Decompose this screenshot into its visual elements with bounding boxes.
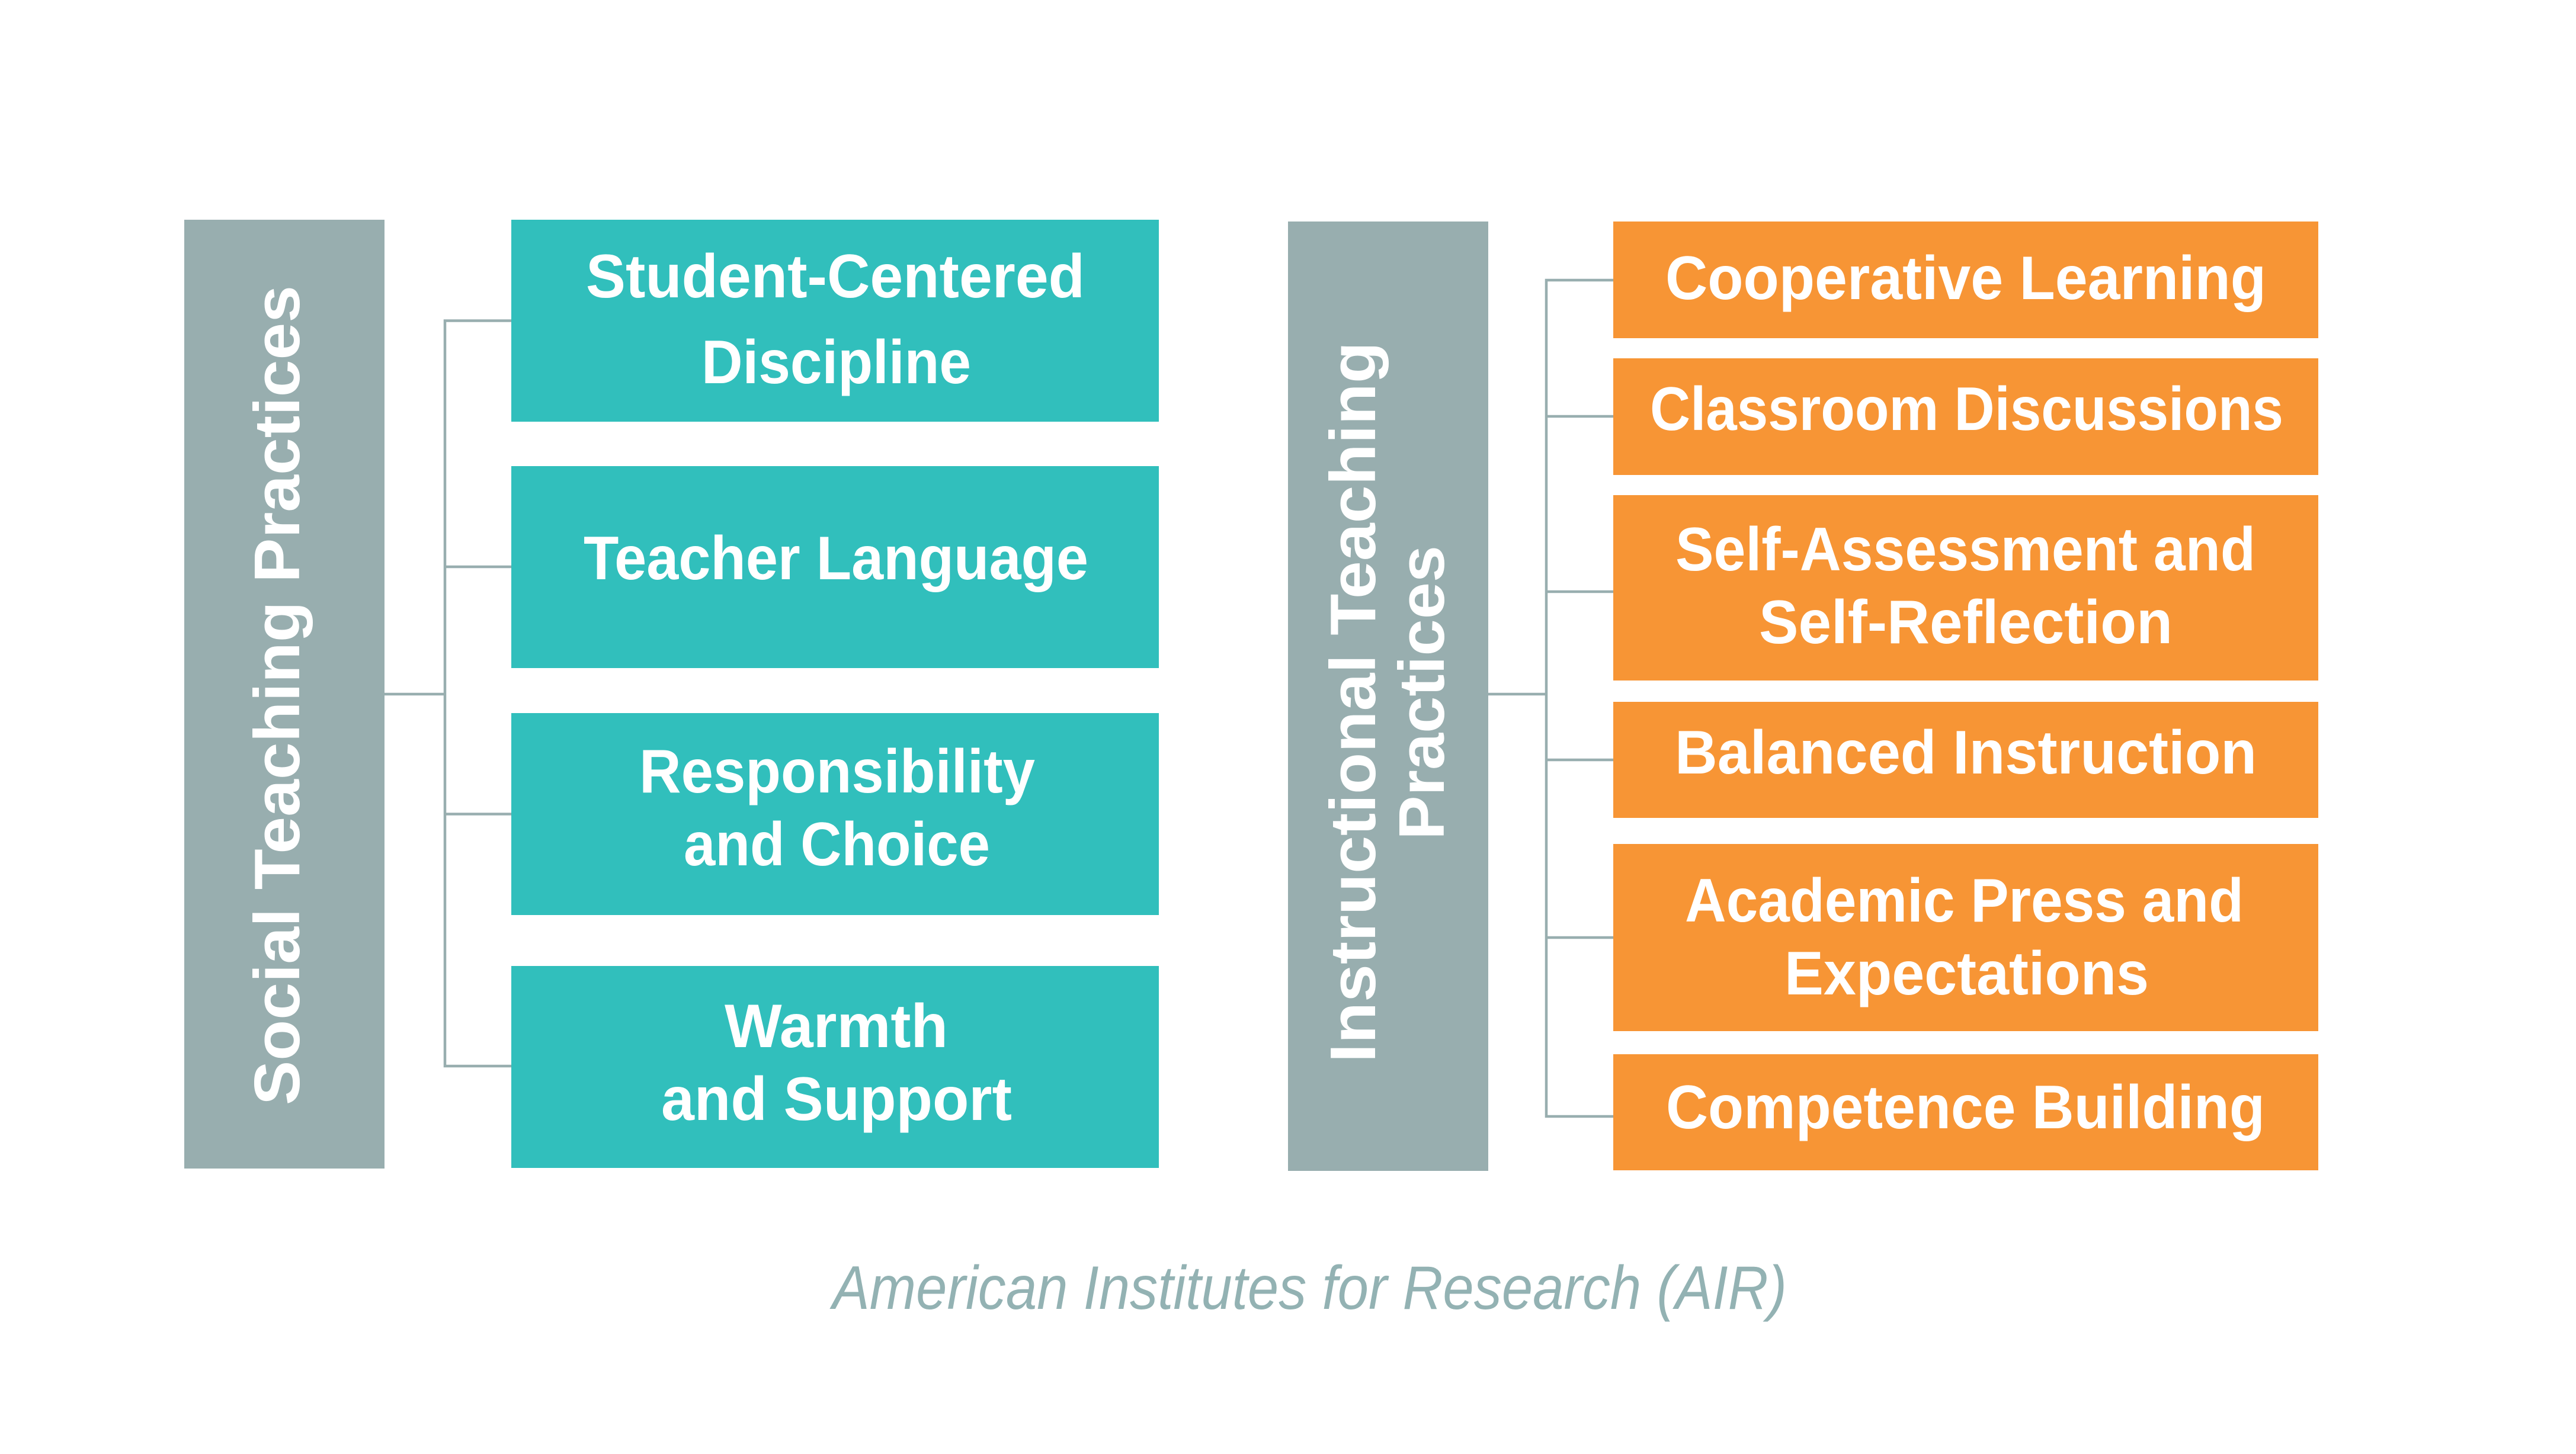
box: classroom discussions [1613,358,2318,475]
heading bar: social teaching practices [184,220,385,1169]
box: teacher language: Teacher Language [584,524,1088,593]
box: responsibility and choice: Responsibility [639,737,1035,806]
panel: instructional teaching practices [1288,222,2318,1171]
heading bar: instructional teaching practices: Instructional Teaching [1317,342,1389,1063]
box: teacher language [511,466,1159,668]
box: student-centered discipline: Discipline [701,328,971,397]
connector: instructional bracket [1488,280,1613,1116]
connector: social bracket [385,321,511,1066]
box: cooperative learning [1613,222,2318,338]
box: self-assessment and self-reflection [1613,495,2318,681]
box: balanced instruction: Balanced Instruction [1675,718,2257,787]
heading bar: instructional teaching practices [1288,222,1488,1171]
box: balanced instruction [1613,702,2318,818]
box: responsibility and choice [511,713,1159,915]
box: student-centered discipline [511,220,1159,422]
box: student-centered discipline: Student-Centered [586,242,1085,311]
box: responsibility and choice: and Choice [684,810,990,879]
box: warmth and support: and Support [661,1065,1012,1134]
box: academic press and expectations: Expectations [1784,939,2149,1008]
box: self-assessment and self-reflection: Self-Assessment and [1675,515,2255,584]
heading bar: social teaching practices: Social Teaching Practices [241,285,313,1105]
box: academic press and expectations: Academic Press and [1685,866,2244,935]
box: competence building: Competence Building [1666,1073,2265,1142]
source credit: American Institutes for Research (AIR) [829,1254,1787,1323]
box: competence building [1613,1054,2318,1170]
box: classroom discussions: Classroom Discussions [1650,375,2283,444]
box: cooperative learning: Cooperative Learning [1665,244,2266,313]
panel: social teaching practices [184,220,1159,1169]
heading bar: instructional teaching practices: Practices [1386,545,1458,840]
box: self-assessment and self-reflection: Self-Reflection [1759,588,2173,657]
box: warmth and support [511,966,1159,1168]
box: warmth and support: Warmth [725,992,948,1061]
box: academic press and expectations [1613,844,2318,1031]
